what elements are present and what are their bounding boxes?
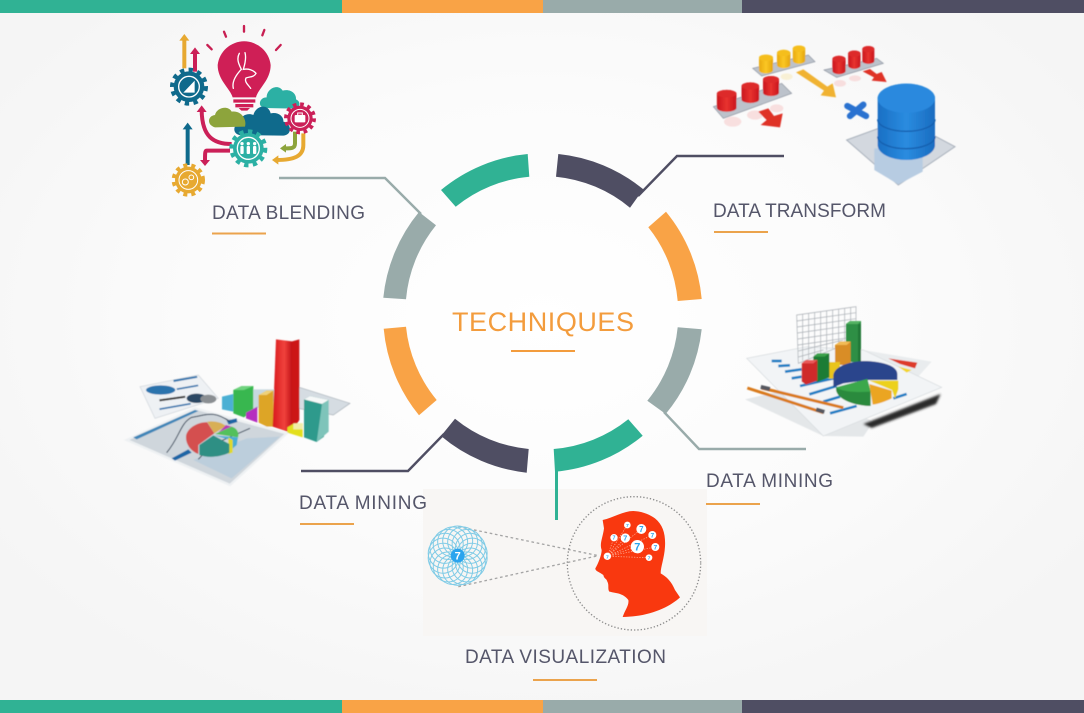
dotted sight lines	[458, 527, 598, 587]
bottom colour band	[0, 700, 1084, 713]
red arrow left	[758, 108, 783, 127]
glass plate	[847, 119, 955, 185]
icon: bar chart with pie and pencils	[745, 307, 942, 437]
bars: magenta	[246, 407, 257, 423]
bars: tall red	[273, 339, 292, 432]
icon: data visualization head: 7	[648, 556, 651, 562]
gear: blue chart	[172, 70, 206, 103]
dark green bar	[813, 353, 829, 382]
rosette center	[451, 549, 465, 563]
back paper	[745, 387, 873, 437]
gear: yellow cogs	[174, 165, 203, 195]
icon: data visualization head	[424, 497, 701, 630]
orange bar	[835, 342, 851, 365]
head silhouette	[595, 511, 680, 617]
front paper	[747, 347, 942, 436]
red mini chart	[888, 358, 917, 368]
blue tabs and trend line	[167, 414, 250, 461]
bars: green	[233, 386, 253, 417]
red arrow right	[863, 69, 887, 82]
blue plus	[847, 105, 866, 116]
back right sheet	[863, 350, 932, 378]
connector: data blending	[279, 178, 421, 214]
back right report	[280, 383, 350, 415]
wire grid	[797, 307, 856, 363]
tray right	[824, 58, 883, 77]
segment: green bottom	[554, 419, 643, 472]
bulb rays	[207, 26, 281, 50]
yellow arrow	[796, 69, 836, 97]
icon: data visualization head: 7	[623, 534, 627, 543]
label: data mining left	[299, 493, 427, 525]
icon: 3D pie and bars on reports	[127, 339, 350, 485]
pie: teal slice	[199, 435, 229, 457]
pie: blue slice	[214, 435, 238, 449]
segment: orange right	[648, 212, 702, 301]
icon: data visualization head: 7	[613, 536, 616, 542]
top colour band	[0, 0, 1084, 13]
tray middle	[753, 55, 815, 76]
pencil bottom	[747, 388, 823, 413]
cylinder reflections	[724, 73, 861, 127]
bars: blue	[222, 394, 233, 412]
arrows	[184, 38, 303, 165]
label: data mining left: DATA MINING	[299, 493, 427, 514]
pie: tan slice	[207, 421, 226, 433]
bars: pale grey behind	[253, 389, 277, 410]
connector: data visualization	[555, 468, 558, 520]
memory items	[604, 522, 659, 561]
icon: data visualization head: 7	[651, 532, 655, 539]
segment: dark top right	[556, 154, 643, 208]
icon: data visualization head: 7	[634, 542, 640, 554]
yellow cylinders	[759, 45, 805, 73]
pie: orange slice	[869, 384, 892, 405]
pie: magenta slice	[218, 425, 232, 433]
icon: data visualization head: 7	[654, 544, 658, 551]
label: data visualization: DATA VISUALIZATION	[465, 647, 666, 668]
bars: teal	[304, 396, 329, 442]
icon: data blending bulb, clouds and gears	[172, 26, 314, 195]
back left report	[140, 375, 218, 418]
green tall bar	[846, 321, 861, 362]
bars: orange-yellow	[259, 391, 273, 427]
pie: red slice	[186, 422, 214, 454]
segment: dark bottom	[441, 419, 529, 473]
segment: gray left	[383, 212, 436, 299]
connector: data mining left	[301, 434, 444, 471]
gear: teal people	[232, 132, 265, 165]
pencil top	[762, 388, 843, 408]
rosette	[424, 523, 491, 589]
ring of segments	[383, 154, 702, 473]
red bar	[802, 360, 817, 385]
red cylinders right	[832, 46, 874, 74]
pie: blue slice	[833, 361, 897, 387]
icon: data visualization head: 7	[639, 525, 644, 534]
yellow short bar	[829, 362, 840, 379]
icon: data transform cylinders and database	[713, 45, 955, 185]
label: data blending: DATA BLENDING	[212, 203, 365, 224]
memory network	[607, 525, 655, 558]
label: data transform: DATA TRANSFORM	[713, 201, 886, 222]
icon: data visualization head: 7	[626, 523, 629, 529]
segment: green top	[441, 154, 529, 207]
center title: TECHNIQUES	[452, 307, 634, 337]
rabbit outline	[233, 53, 256, 88]
database	[878, 84, 935, 160]
paper shadow	[863, 394, 941, 428]
pie: green slice	[836, 379, 871, 406]
rosette center: 7	[455, 551, 461, 563]
olive cloud	[209, 108, 245, 127]
pie: green slice	[215, 427, 238, 437]
gear: magenta briefcase	[286, 104, 314, 132]
main report	[127, 408, 287, 485]
segment: orange left	[384, 327, 437, 415]
red cylinders left	[717, 76, 779, 112]
icon: data visualization head: 7	[606, 554, 609, 560]
pie: yellow slice	[869, 381, 898, 399]
bars: yellow	[287, 423, 303, 437]
label: data mining right	[706, 471, 833, 505]
dotted circle	[567, 497, 701, 630]
connector: data mining right	[664, 412, 806, 449]
segment: gray right	[647, 327, 702, 414]
lightbulb	[218, 41, 271, 97]
label: data mining right: DATA MINING	[706, 471, 833, 492]
tray left	[713, 83, 792, 118]
blue cloud	[234, 107, 290, 136]
visualization image panel	[423, 489, 707, 636]
teal cloud	[260, 87, 299, 109]
connector: data transform	[638, 156, 784, 196]
pie: yellow slice	[228, 437, 233, 454]
blue row lines	[772, 361, 907, 413]
